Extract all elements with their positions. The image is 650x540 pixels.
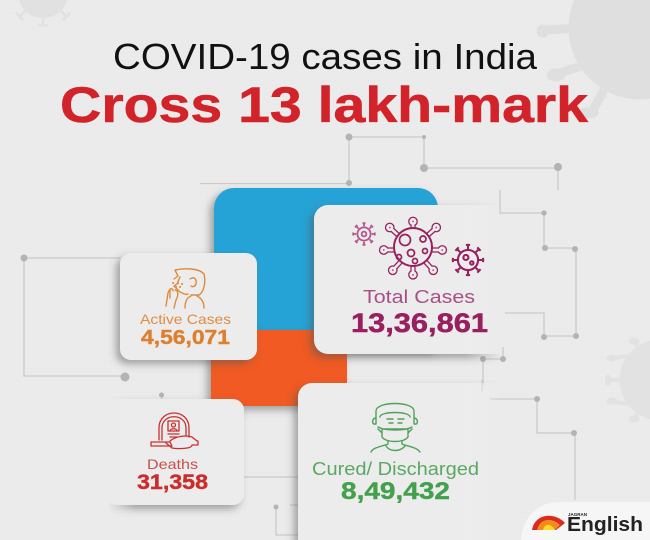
icon: viruses — [353, 219, 483, 277]
value: deaths: 31,358 — [137, 471, 208, 494]
panel: deaths — [106, 399, 244, 505]
virus decoration: right — [606, 338, 650, 422]
virus decoration: top left — [11, 0, 75, 25]
label: deaths: Deaths — [147, 456, 198, 472]
logo word: English — [567, 514, 643, 536]
icon: sun — [532, 516, 565, 530]
circuit nodes — [20, 134, 579, 510]
icon: coughing person — [166, 269, 205, 308]
virus decoration: top right — [537, 0, 650, 118]
orange block — [211, 330, 347, 406]
icon: masked person — [371, 404, 420, 452]
label: active cases: Active Cases — [140, 311, 231, 327]
panel: active cases — [120, 253, 257, 360]
headline: Cross 13 lakh-mark — [60, 77, 588, 133]
logo: Jagran English — [521, 502, 650, 540]
label: total cases: Total Cases — [363, 287, 475, 307]
circuit lines — [24, 137, 576, 535]
panel: total cases — [314, 205, 514, 354]
title: COVID-19 cases in India — [113, 36, 538, 77]
label: cured: Cured/ Discharged — [312, 459, 479, 479]
logo small text: JAGRAN — [568, 512, 587, 517]
value: active cases: 4,56,071 — [141, 327, 230, 349]
value: total cases: 13,36,861 — [351, 308, 488, 338]
panel: cured — [298, 383, 518, 540]
icon: gravestone — [151, 413, 198, 449]
blue block — [214, 188, 438, 350]
value: cured: 8,49,432 — [341, 478, 450, 505]
